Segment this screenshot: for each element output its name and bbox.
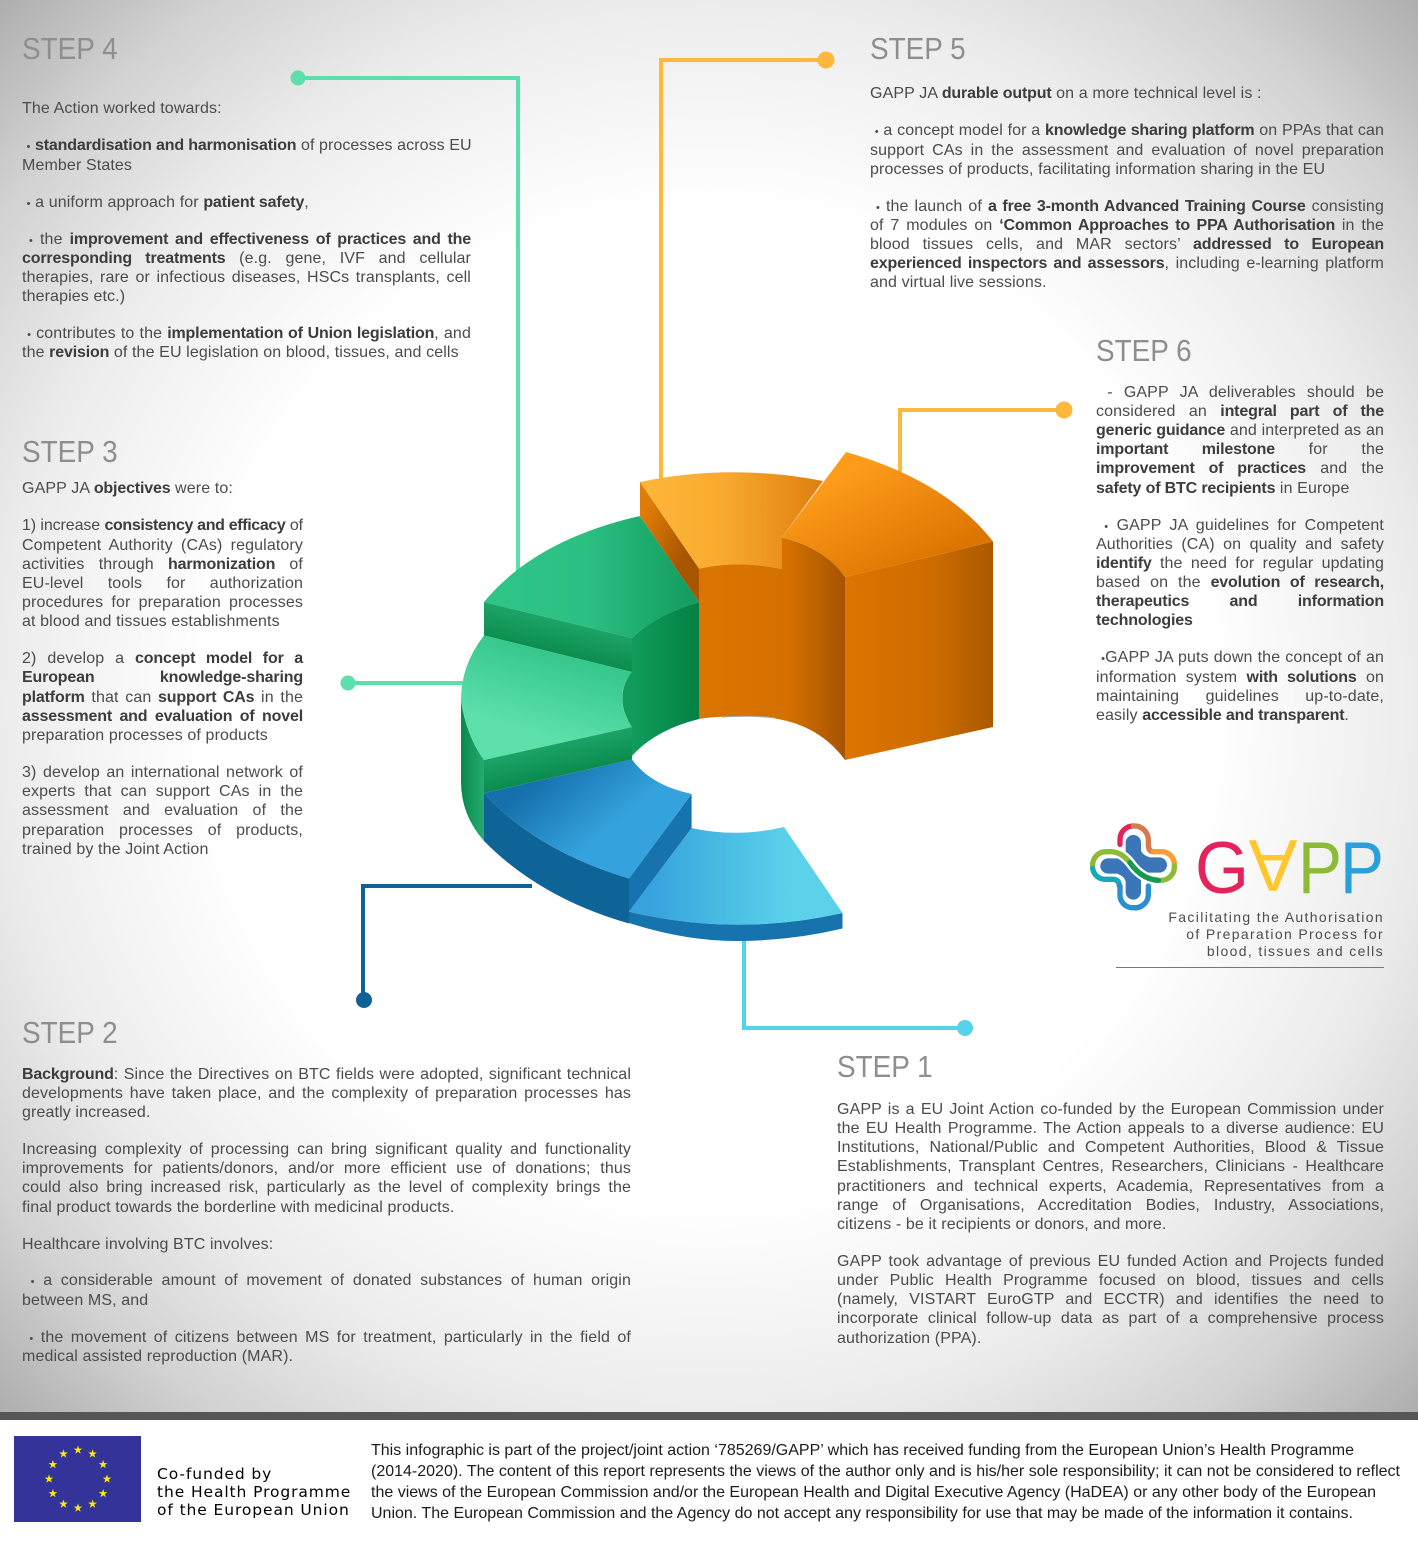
text: step 2: • a considerable amount of movement of donated substances of human origin	[31, 1272, 631, 1289]
text: step 4: • a uniform approach for patient safety,	[27, 194, 309, 211]
text: step 2: developments have taken place, and the complexity of preparation processes has	[22, 1085, 631, 1102]
text: step 6: improvement of practices and the	[1096, 460, 1384, 477]
text: step 4: • the improvement and effectiveness of practices and the	[29, 231, 471, 248]
text: step 2: Background: Since the Directives on BTC fields were adopted, significant technical	[22, 1066, 631, 1083]
text: step 5: and virtual live sessions.	[870, 274, 1047, 291]
segment: step 1 light blue	[629, 827, 842, 941]
text: step 6: •GAPP JA puts down the concept of an	[1101, 649, 1384, 666]
text: step 1: GAPP is a EU Joint Action co-funded by the European Commission under	[837, 1101, 1384, 1118]
text: step 3: assessment and evaluation of the	[22, 802, 303, 819]
footer disclaimer: This infographic is part of the project/joint action ‘785269/GAPP’ which has received funding from the European Union’s Health Programme	[371, 1442, 1354, 1459]
text: step 6: based on the evolution of research,	[1096, 574, 1384, 591]
text: step 5: experienced inspectors and assessors, including e-learning platform	[870, 255, 1384, 272]
text: step 6: - GAPP JA deliverables should be	[1107, 384, 1384, 401]
text: step 3: at blood and tissues establishments	[22, 613, 280, 630]
logo wordmark	[1195, 833, 1384, 903]
text: step 6: • GAPP JA guidelines for Competent	[1104, 517, 1384, 534]
text: step 3: trained by the Joint Action	[22, 841, 208, 858]
text: step 6: important milestone for the	[1096, 441, 1384, 458]
text: step 2: medical assisted reproduction (MAR).	[22, 1348, 293, 1365]
text: step 1: Institutions, National/Public and Competent Authorities, Blood & Tissue	[837, 1139, 1384, 1156]
connector: step 3	[340, 676, 470, 690]
text: step 2: • the movement of citizens between MS for treatment, particularly in the field of	[29, 1329, 631, 1346]
connector: step 6	[900, 402, 1072, 480]
text: step 3: EU-level tools for authorization	[22, 575, 303, 592]
segment: step 2 dark blue	[484, 760, 692, 924]
heading: step 6: STEP 6	[1096, 333, 1192, 368]
text: step 3: activities through harmonization of	[22, 556, 303, 573]
text: step 1: authorization (PPA).	[837, 1330, 981, 1347]
text: step 6: generic guidance and interpreted as an	[1096, 422, 1384, 439]
text: step 1	[837, 1101, 1384, 1347]
text: step 5: • the launch of a free 3-month Advanced Training Course consisting	[876, 198, 1384, 215]
logo tagline: Facilitating the Authorisation	[1168, 909, 1384, 925]
GAPP logo	[1090, 823, 1384, 910]
connector: step 4	[290, 70, 518, 580]
icon: GAPP cross mark	[1090, 823, 1177, 910]
text: step 6	[1096, 384, 1384, 724]
text: step 2: final product towards the borderline with medicinal products.	[22, 1199, 454, 1216]
text: step 2: Healthcare involving BTC involves:	[22, 1236, 273, 1252]
text: step 2: greatly increased.	[22, 1104, 150, 1121]
text: step 3: preparation processes of products	[22, 727, 268, 744]
text: step 3: European knowledge-sharing	[22, 669, 303, 686]
text: step 1: citizens - be it recipients or donors, and more.	[837, 1216, 1166, 1233]
text: step 3: 2) develop a concept model for a	[22, 650, 303, 667]
logo tagline: of Preparation Process for	[1186, 926, 1384, 942]
text: step 6: maintaining guidelines up-to-date,	[1096, 688, 1384, 705]
text: step 1: the EU Health Programme. The Action appeals to a diverse audience: EU	[837, 1120, 1384, 1137]
text: step 4	[22, 100, 472, 361]
text: step 6: technologies	[1096, 612, 1193, 629]
3D donut chart	[461, 452, 993, 941]
heading: step 5: STEP 5	[870, 31, 966, 66]
text: step 3: experts that can support CAs in the	[22, 783, 303, 800]
text: step 3: preparation processes of products,	[22, 822, 303, 839]
logo tagline: blood, tissues and cells	[1207, 943, 1384, 959]
co-funded label: Co-funded by	[157, 1465, 272, 1483]
text: step 6: therapeutics and information	[1096, 593, 1384, 610]
text: step 5: of 7 modules on ‘Common Approaches to PPA Authorisation in the	[870, 217, 1384, 234]
text: step 5: GAPP JA durable output on a more technical level is :	[870, 85, 1262, 102]
connector: step 5	[661, 52, 834, 490]
text: step 3: platform that can support CAs in the	[22, 689, 303, 706]
footer disclaimer: the views of the European Commission and/or the European Health and Digital Executive Agency (HaDEA) or any other body of the European	[371, 1484, 1376, 1501]
segment: step 3 lower green	[461, 636, 632, 841]
text: step 1: range of Organisations, Accreditation Bodies, Industry, Associations,	[837, 1197, 1384, 1214]
text: step 6: safety of BTC recipients in Europe	[1096, 480, 1349, 497]
icon: EU flag	[14, 1436, 141, 1522]
text: step 4: therapies, rare or infectious diseases, HSCs transplants, cell	[22, 269, 471, 286]
text: step 6: easily accessible and transparent.	[1096, 707, 1349, 724]
text: step 3: assessment and evaluation of novel	[22, 708, 303, 725]
co-funded label: the Health Programme	[157, 1483, 351, 1501]
footer disclaimer	[371, 1442, 1400, 1522]
footer disclaimer: Union. The European Commission and the Agency do not accept any responsibility for use that may be made of the information it contains.	[371, 1505, 1353, 1522]
text: step 3: procedures for preparation processes	[22, 594, 303, 611]
text: step 3: 3) develop an international network of	[22, 764, 303, 781]
text: step 2	[22, 1066, 631, 1365]
text: step 5: • a concept model for a knowledge sharing platform on PPAs that can	[875, 122, 1384, 139]
segment: step 5 light orange	[640, 472, 823, 602]
text: step 2: could also bring increased risk, particularly as the level of complexity brings the	[22, 1179, 631, 1196]
footer disclaimer: (2014-2020). The content of this report represents the views of the author only and is his/her sole responsibility; it can not be considered to reflect	[371, 1463, 1400, 1480]
text: step 5: support CAs in the assessment and evaluation of novel preparation	[870, 142, 1384, 159]
text: step 1: GAPP took advantage of previous EU funded Action and Projects funded	[837, 1253, 1384, 1270]
text: step 2: Increasing complexity of processing can bring significant quality and functionality	[22, 1141, 631, 1158]
text: step 6: Authorities (CA) on quality and safety	[1096, 536, 1384, 553]
text: step 4: Member States	[22, 157, 132, 174]
text: step 3	[22, 480, 304, 858]
text: step 2: between MS, and	[22, 1292, 148, 1309]
text: step 2: improvements for patients/donors, and/or more efficient use of donations; thus	[22, 1160, 631, 1177]
text: step 1: Establishments, Transplant Centres, Researchers, Clinicians - Healthcare	[837, 1158, 1384, 1175]
logo tagline	[1168, 909, 1384, 959]
text: step 5: processes of products, facilitating information sharing in the EU	[870, 161, 1325, 178]
text: step 5	[870, 85, 1384, 291]
heading: step 1: STEP 1	[837, 1049, 933, 1084]
text: step 1: (namely, VISTART EuroGTP and ECCTR) and identifies the need to	[837, 1291, 1384, 1308]
text: step 3: GAPP JA objectives were to:	[22, 480, 233, 497]
logo divider	[1116, 967, 1384, 968]
text: step 1: practitioners and technical experts, Academia, Representatives from a	[837, 1178, 1384, 1195]
connector: step 2	[356, 886, 532, 1008]
text: step 3: Competent Authority (CAs) regulatory	[22, 537, 303, 554]
text: step 4: the revision of the EU legislation on blood, tissues, and cells	[22, 344, 459, 361]
co-funded label	[157, 1465, 351, 1519]
text: step 4: therapies etc.)	[22, 288, 125, 305]
text: step 6: considered an integral part of the	[1096, 403, 1384, 420]
text: step 6: identify the need for regular updating	[1096, 555, 1384, 572]
text: step 6: information system with solutions on	[1096, 669, 1384, 686]
heading: step 3: STEP 3	[22, 434, 118, 469]
connector: step 1	[744, 930, 973, 1036]
text: step 1: under Public Health Programme focused on blood, tissues and cells	[837, 1272, 1384, 1289]
text: step 4: • standardisation and harmonisation of processes across EU	[27, 137, 472, 154]
text: step 1: incorporate clinical follow-up data as part of a comprehensive process	[837, 1310, 1384, 1327]
text: step 3: 1) increase consistency and efficacy of	[22, 517, 303, 534]
text: step 4: The Action worked towards:	[22, 100, 222, 117]
heading: step 4: STEP 4	[22, 31, 118, 66]
text: step 4: corresponding treatments (e.g. gene, IVF and cellular	[22, 250, 471, 267]
segment: step 6 orange	[699, 452, 993, 760]
text: step 4: • contributes to the implementation of Union legislation, and	[27, 325, 471, 342]
co-funded label: of the European Union	[157, 1501, 350, 1519]
text: step 5: blood tissues cells, and MAR sectors’ addressed to European	[870, 236, 1384, 253]
heading: step 2: STEP 2	[22, 1015, 118, 1050]
segment: step 4 upper green	[484, 516, 699, 756]
